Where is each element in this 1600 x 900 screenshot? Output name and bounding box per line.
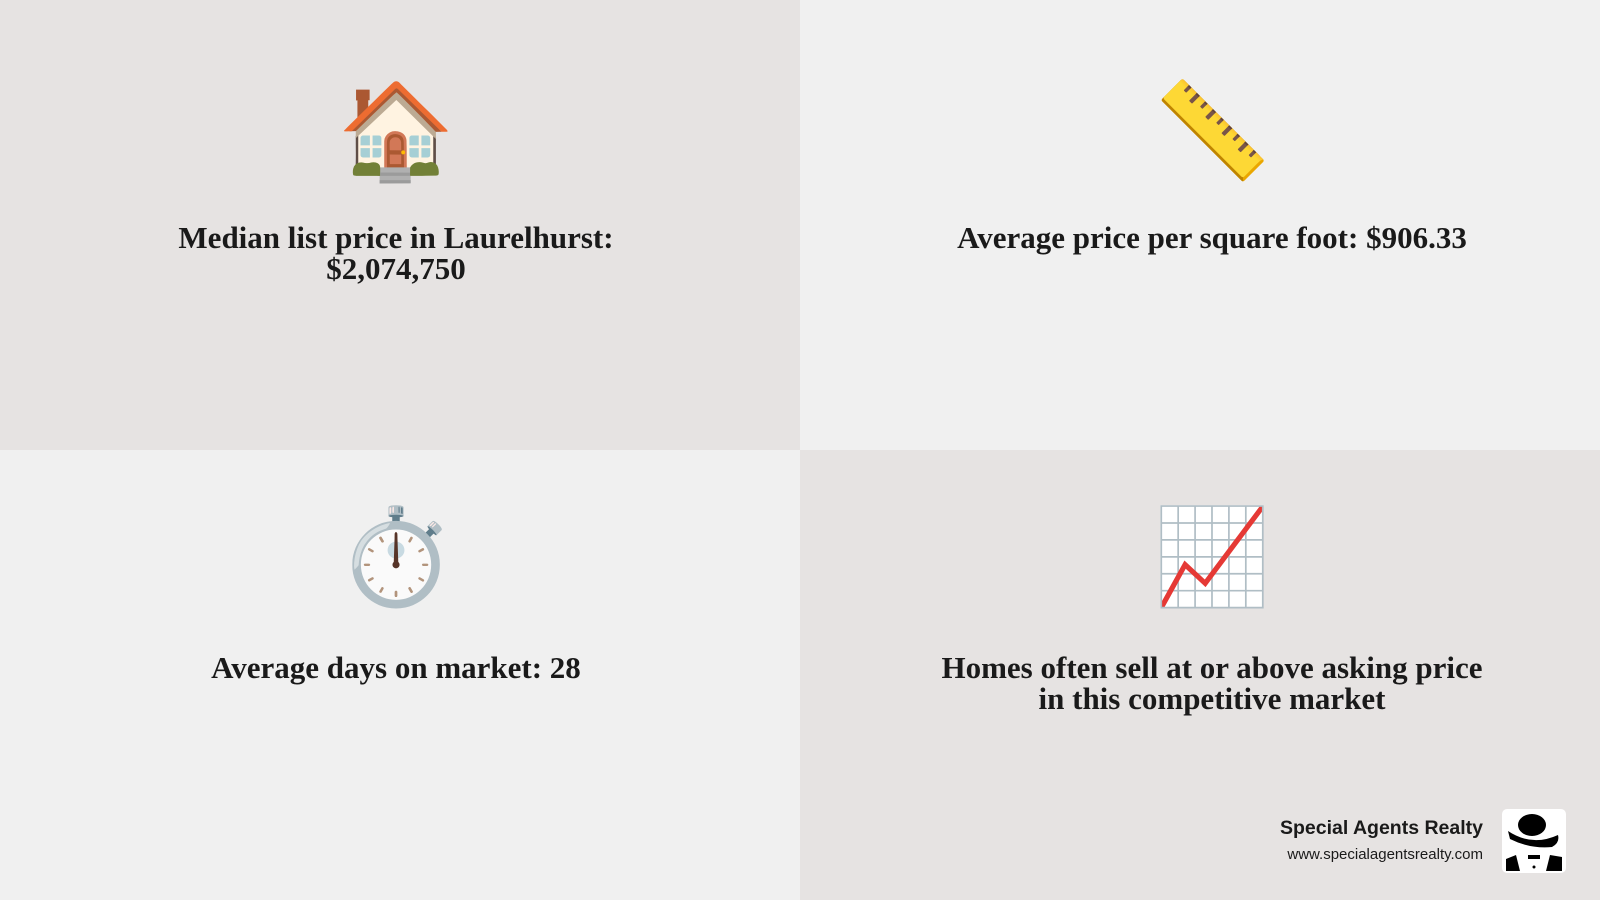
text: price per sq ft: Average price per square foot: $906.33 [957, 220, 1467, 255]
icon: chart increasing: 📈 [1153, 502, 1271, 612]
text: median list price: Median list price in Laurelhurst: [178, 220, 614, 255]
text: days on market: Average days on market: 28 [211, 650, 581, 685]
panel: days on market [0, 450, 800, 900]
panel: competitive market [800, 450, 1600, 900]
text: competitive market: Homes often sell at or above asking price [941, 650, 1483, 685]
icon: ruler: 📏 [1153, 76, 1271, 186]
text: competitive market: in this competitive market [1039, 681, 1385, 716]
brand url: www.specialagentsrealty.com [1287, 846, 1483, 863]
panel: price per square foot [800, 0, 1600, 450]
icon: house: 🏠 [337, 76, 455, 186]
branding [1280, 809, 1566, 873]
brand name: Special Agents Realty [1280, 817, 1483, 839]
panel: median list price [0, 0, 800, 450]
icon: stopwatch: ⏱️ [337, 502, 455, 612]
text: median list price: $2,074,750 [326, 251, 466, 286]
text: median list price [178, 220, 614, 286]
text: competitive market [941, 650, 1483, 716]
logo [1502, 809, 1566, 873]
